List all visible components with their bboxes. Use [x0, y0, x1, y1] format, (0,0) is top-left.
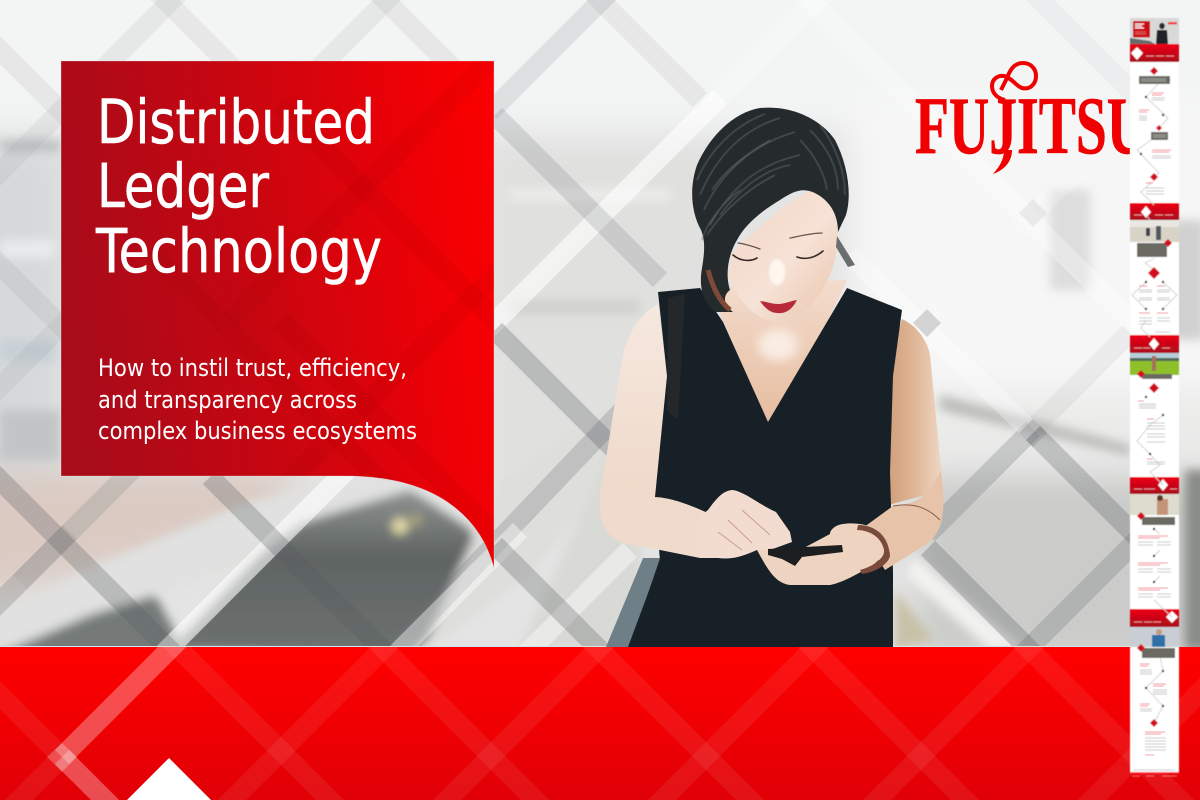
infinity symbol	[992, 63, 1036, 100]
decorative crossing tiles	[913, 199, 1047, 447]
thumbnail: footer	[1132, 775, 1177, 777]
title: Technology	[95, 216, 382, 287]
white diamond	[127, 758, 211, 800]
Fujitsu logo	[915, 63, 1147, 174]
wristwatch	[857, 525, 890, 574]
thumbnail: zigzag connector lines	[1132, 84, 1177, 723]
subtitle: and transparency across	[98, 386, 357, 414]
thumbnail: black dots	[1140, 96, 1164, 707]
hair	[692, 108, 849, 312]
long thumbnail strip of full infographic	[1130, 18, 1179, 776]
black sleeveless dress	[628, 288, 902, 647]
smartphone	[768, 545, 843, 566]
thumbnail: cover	[1130, 18, 1179, 44]
panel lattice	[223, 61, 494, 567]
chest and neck	[716, 280, 847, 425]
bag strap	[667, 294, 685, 420]
subtitle: complex business ecosystems	[98, 417, 417, 445]
title: Distributed	[97, 87, 375, 158]
thumbnail: red sub-headings	[1138, 93, 1171, 755]
thumbnail: photo strips	[1130, 220, 1179, 647]
upper right arm	[885, 319, 943, 506]
thumbnail: red diamonds	[1137, 67, 1172, 727]
left forearm	[600, 480, 730, 558]
highlighted lattice bars	[62, 632, 187, 800]
hair strands	[697, 114, 845, 240]
shoulder bag	[606, 558, 669, 647]
right forearm	[860, 470, 943, 570]
title	[95, 87, 382, 287]
subtitle: How to instil trust, efficiency,	[98, 354, 407, 382]
eyes, brows and lips	[733, 233, 823, 260]
photo: woman looking at phone	[600, 108, 943, 647]
thumbnail: grey body copy	[1133, 79, 1175, 770]
red band with lattice	[0, 632, 1200, 800]
red title panel with speech-bubble tail	[60, 61, 494, 568]
title: Ledger	[97, 151, 270, 222]
subtitle	[98, 354, 417, 445]
thumbnail: grey heading boxes	[1137, 76, 1175, 658]
upper left arm	[600, 304, 667, 510]
hands holding phone	[757, 523, 890, 585]
face	[728, 190, 838, 322]
thumbnail: red navigation bands	[1130, 44, 1179, 627]
